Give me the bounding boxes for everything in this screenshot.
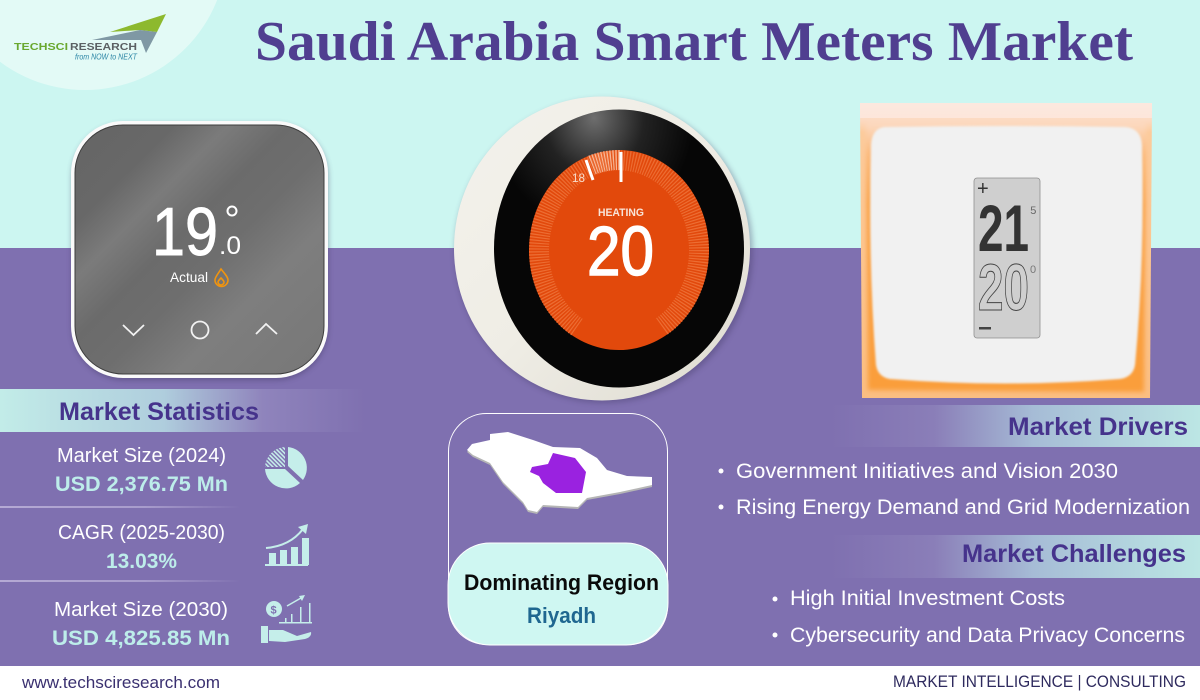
stat: CAGR: 13.03% — [106, 550, 177, 573]
stat: market size 2030: Market Size (2030) — [54, 599, 228, 621]
stat: CAGR: CAGR (2025-2030) — [58, 522, 225, 544]
label pill — [448, 543, 668, 645]
controls: down, select, up — [123, 322, 277, 338]
label: dominating region: Dominating Region — [464, 570, 659, 595]
icon: money in hand: $ — [270, 604, 277, 616]
footer strip — [0, 666, 1200, 700]
orange display — [529, 150, 709, 350]
stat: market size 2030 — [52, 599, 230, 650]
heading: Market Challenges — [962, 540, 1186, 568]
active ticks — [592, 160, 621, 165]
LCD readout: 21 — [978, 191, 1029, 265]
background: mint upper band — [0, 0, 1200, 248]
readings: 20 — [587, 212, 654, 290]
LCD readout: 20 — [978, 250, 1029, 324]
panel: market drivers — [718, 405, 1200, 519]
panel: dominating region — [448, 414, 668, 645]
footer: website: www.techsciresearch.com — [21, 673, 220, 692]
logo: TechSci Research: TECHSCI — [14, 42, 68, 53]
logo: TechSci Research: RESEARCH — [70, 42, 137, 53]
background: purple lower band — [0, 248, 1200, 666]
heading: Market Drivers — [1008, 413, 1188, 441]
heading band — [0, 389, 365, 432]
title: Saudi Arabia Smart Meters Market — [255, 11, 1133, 73]
dial ticks — [539, 160, 699, 327]
LCD readout — [977, 178, 1037, 330]
LCD readout: + — [977, 178, 989, 200]
icon: pie chart — [265, 447, 307, 488]
device: square grey thermostat — [71, 121, 328, 380]
label: Riyadh: Riyadh — [527, 603, 596, 628]
challenge list: High Initial Investment Costs — [790, 587, 1065, 610]
stat: market size 2024: Market Size (2024) — [57, 445, 226, 467]
panel: market challenges — [772, 535, 1200, 647]
LCD screen — [974, 178, 1040, 338]
heading band — [830, 535, 1200, 578]
stat: CAGR — [58, 522, 225, 573]
driver list — [718, 460, 1190, 519]
readings: HEATING — [598, 207, 644, 219]
icon: money in hand — [261, 595, 312, 643]
map: Saudi Arabia with Riyadh highlighted — [467, 432, 652, 514]
logo: TechSci Research: from NOW to NEXT — [75, 52, 138, 62]
readings — [572, 171, 654, 290]
logo: TechSci Research — [0, 0, 227, 90]
LCD readout: 5 — [1030, 206, 1037, 218]
heading: Market Statistics — [59, 398, 259, 426]
readings: 18 — [572, 171, 585, 185]
stat: market size 2030: USD 4,825.85 Mn — [52, 627, 230, 650]
reading: 19.0: .0 — [219, 232, 241, 260]
icon: flame — [215, 269, 228, 286]
reading: 19.0: Actual — [170, 269, 208, 285]
device: round Nest thermostat — [454, 96, 753, 403]
driver list: Government Initiatives and Vision 2030 — [736, 460, 1118, 483]
reading: 19.0: 19 — [152, 194, 218, 270]
driver list: Rising Energy Demand and Grid Modernization — [736, 496, 1190, 519]
heading band — [830, 405, 1200, 447]
icon: growth bars — [265, 524, 309, 566]
challenge list — [772, 587, 1185, 647]
device: square Netatmo thermostat — [860, 103, 1152, 398]
panel: market statistics — [0, 389, 365, 650]
stat: market size 2024: USD 2,376.75 Mn — [55, 473, 228, 496]
stat: market size 2024 — [55, 445, 228, 496]
LCD readout: 0 — [1030, 264, 1036, 276]
challenge list: Cybersecurity and Data Privacy Concerns — [790, 624, 1185, 647]
